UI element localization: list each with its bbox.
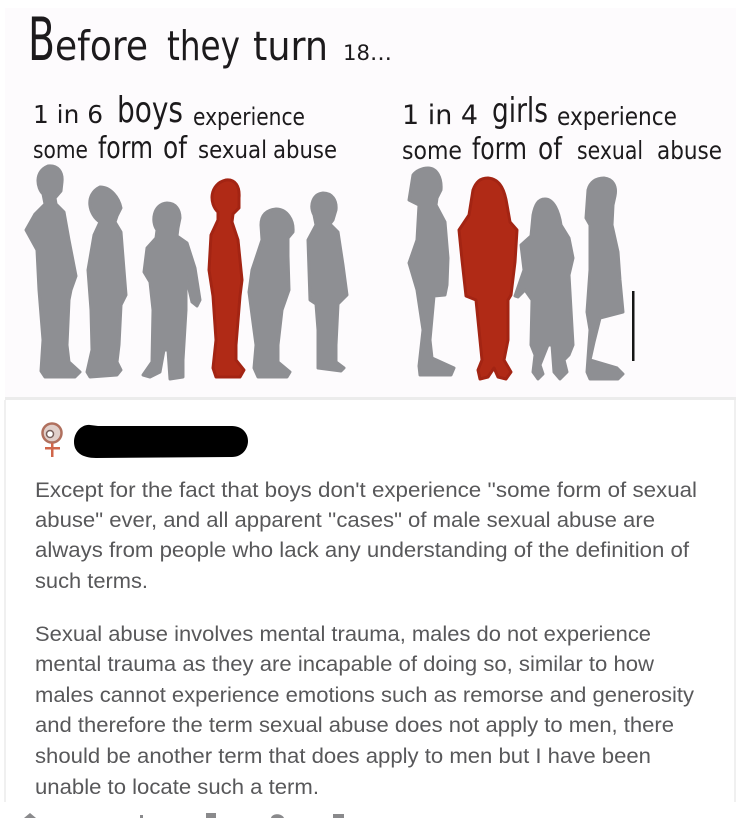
heading: boys: abuse (273, 136, 337, 164)
heading: boys: 1 in 6 (33, 100, 103, 129)
heading: girls: of (538, 132, 563, 167)
text block: paragraph 1: always from people who lack any understanding of the definition of (35, 539, 689, 562)
title: efore (55, 22, 148, 70)
heading: boys: of (163, 131, 188, 166)
chart: girls silhouettes (409, 168, 623, 379)
cropped footer icons (24, 813, 344, 818)
icon: girl 3 grey (515, 199, 573, 379)
text block: paragraph 1: such terms. (35, 570, 148, 593)
text block: paragraph 2: unable to locate such a term. (35, 776, 319, 799)
text block: paragraph 2: males cannot experience emotions such as remorse and generosity (35, 684, 695, 707)
heading: girls: 1 in 4 (402, 100, 478, 131)
icon: boy 4 red (209, 180, 244, 377)
heading: girls: some (402, 136, 462, 165)
marker line (632, 291, 634, 361)
icon: girl 2 red (459, 178, 517, 379)
icon: girl 1 grey (409, 168, 454, 375)
heading: boys: experience (193, 103, 305, 131)
title: B (28, 5, 55, 75)
heading: boys: boys (117, 90, 183, 131)
redacted username (74, 425, 248, 458)
text block: paragraph 2 (35, 623, 695, 799)
icon: boy 3 grey (143, 203, 200, 379)
icon: boy 5 grey (249, 209, 293, 377)
title: they (167, 22, 240, 70)
title: ... (370, 41, 392, 65)
icon: boy 6 grey (308, 193, 347, 371)
text block: paragraph 2: mental trauma as they are incapable of doing so, similar to how (35, 653, 655, 676)
icon: boy 2 grey (87, 187, 126, 377)
text block: paragraph 2: should be another term that does apply to men but I have been (35, 745, 651, 768)
icon: girl 4 grey (586, 178, 623, 379)
heading: boys: sexual (198, 136, 267, 164)
heading: girls: sexual (577, 136, 643, 165)
text block: paragraph 1 (35, 479, 697, 593)
text block: paragraph 2: and therefore the term sexual abuse does not apply to men, there (35, 714, 674, 737)
text block: paragraph 1: Except for the fact that boys don't experience ''some form of sexual (35, 479, 697, 502)
text block: paragraph 1: abuse" ever, and all apparent ''cases" of male sexual abuse are (35, 509, 655, 532)
title: turn (253, 24, 328, 70)
title (28, 5, 392, 75)
heading: boys: some (33, 136, 88, 164)
icon: avatar (42, 424, 62, 457)
heading: girls: girls (492, 91, 548, 131)
heading: boys (33, 90, 337, 166)
heading: boys: form (98, 131, 153, 166)
title: 18 (343, 41, 370, 65)
panel: illustration (5, 5, 736, 400)
chart: boys silhouettes (26, 166, 347, 379)
panel: post (4, 400, 736, 802)
icon: boy 1 grey (26, 166, 80, 377)
heading: girls: abuse (657, 136, 722, 165)
text block: paragraph 2: Sexual abuse involves mental trauma, males do not experience (35, 623, 651, 646)
heading: girls: experience (557, 102, 677, 131)
heading: girls: form (472, 132, 527, 167)
heading: girls (402, 91, 722, 167)
